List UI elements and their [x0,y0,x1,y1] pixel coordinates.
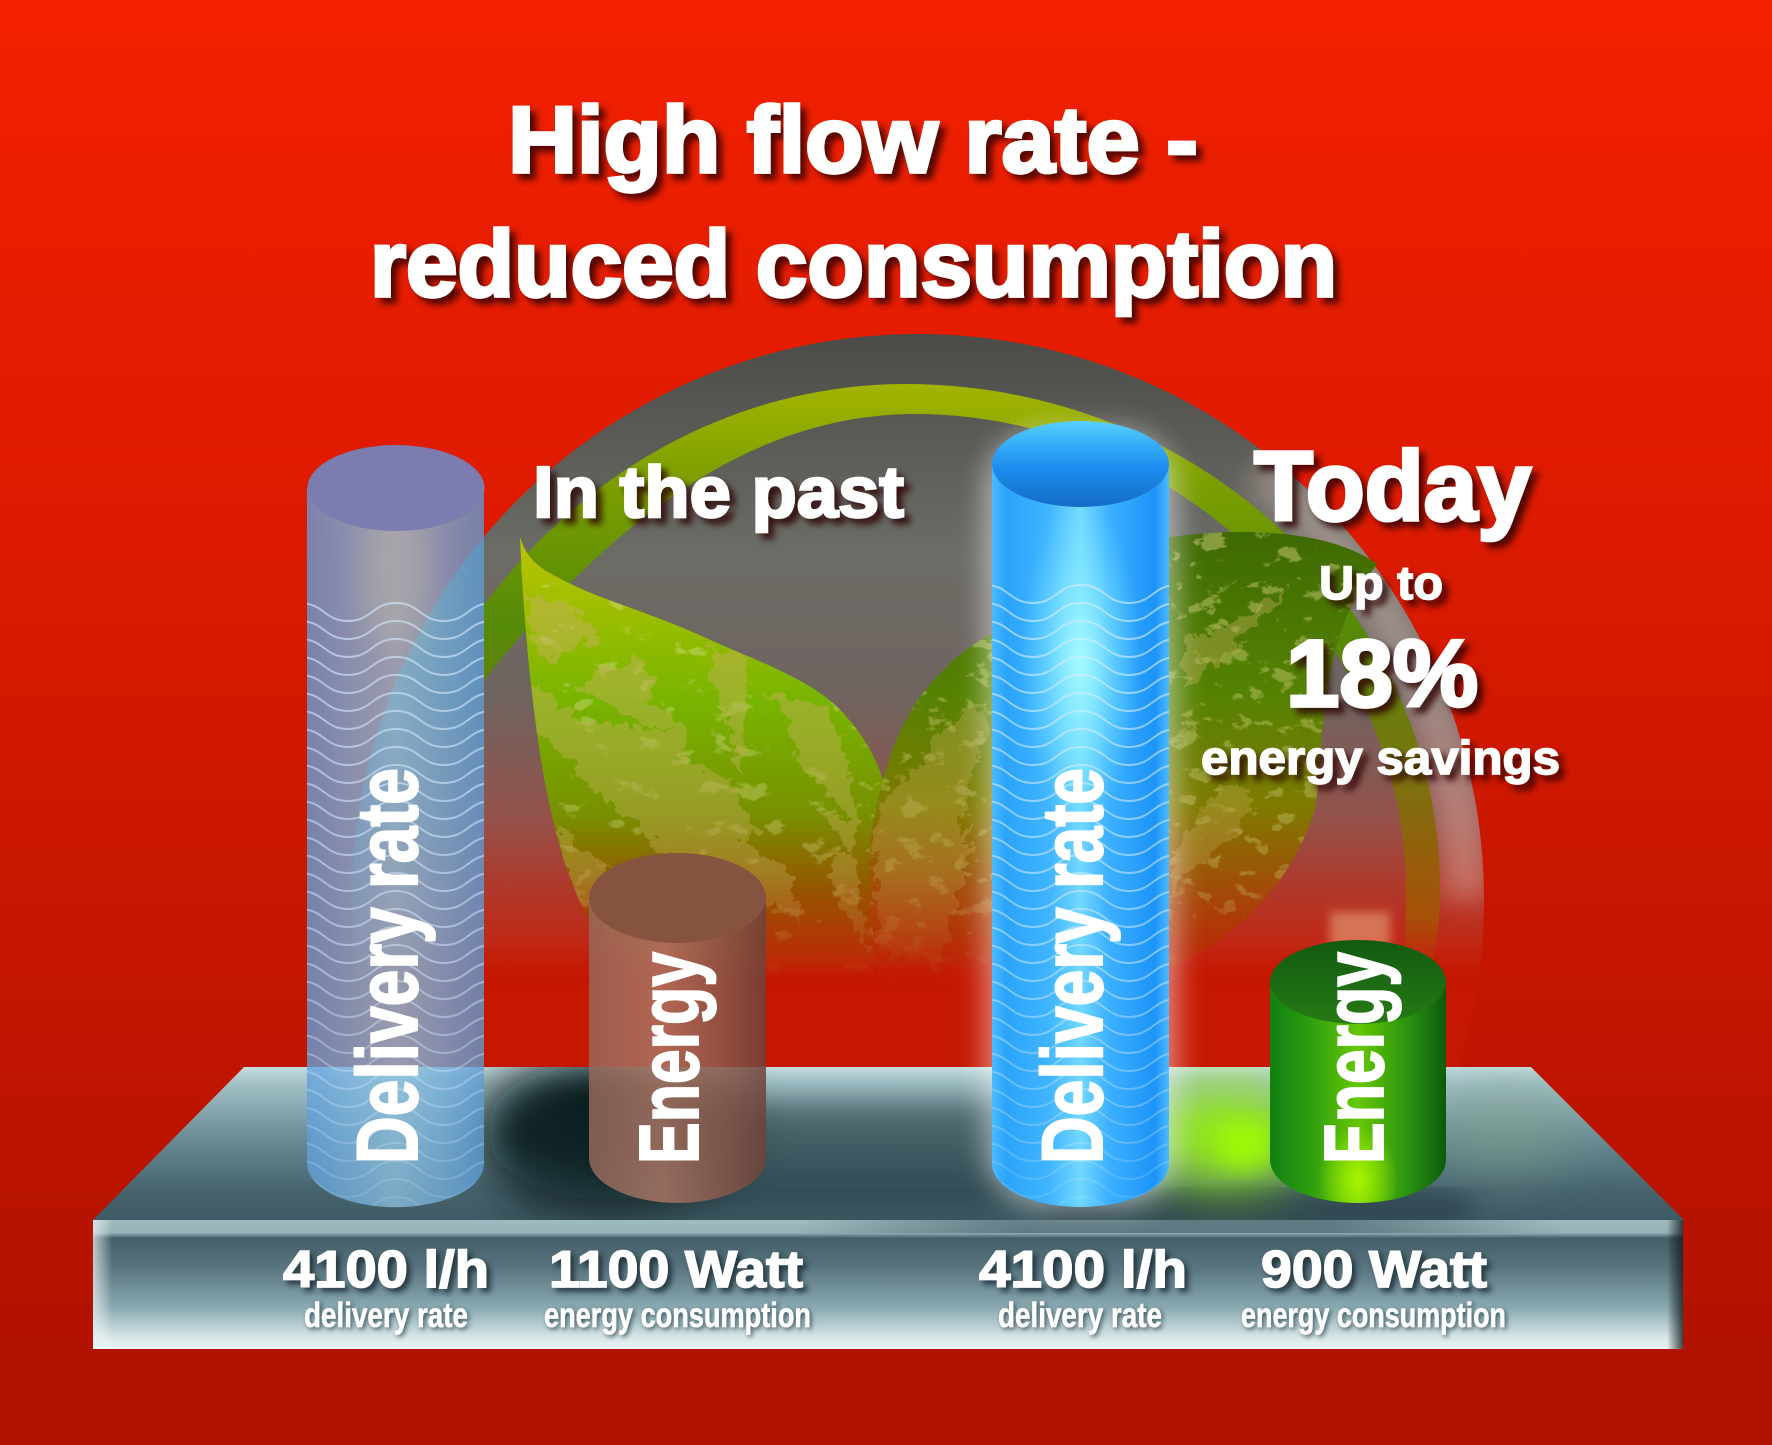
savings callout [1201,556,1560,784]
wave lines today [985,585,1177,1215]
stat: past delivery rate: 4100 l/h [283,1241,489,1299]
heading: in the past: In the past [533,453,904,533]
stat: today energy [1241,1241,1506,1335]
green arc band [484,384,1440,990]
platform shadows and glow [485,1060,1575,1221]
title: reduced consumption [370,211,1337,316]
savings callout: 18% [1286,621,1478,727]
stat: today energy: 900 Watt [1261,1241,1487,1299]
pale glow above energy cylinder [1330,912,1390,948]
stat: past energy: energy consumption [544,1296,811,1335]
platform front face [93,1220,1683,1349]
cylinder: today energy [1270,940,1446,1203]
cylinder: past energy [589,853,766,1203]
cylinder top past [308,445,484,531]
title [370,87,1337,316]
stat: past delivery rate [283,1241,489,1335]
stat: today delivery rate: delivery rate [998,1296,1162,1335]
cylinder glow: today delivery rate [985,430,1177,1208]
cylinder top today [992,421,1169,507]
stat: today energy: energy consumption [1241,1296,1506,1335]
cylinder: today delivery rate [985,421,1177,1215]
label delivery rate past: Delivery rate [340,768,436,1164]
label delivery rate today: Delivery rate [1025,768,1121,1164]
platform [93,1060,1684,1349]
wave lines past [300,603,492,1215]
title: High flow rate - [508,87,1198,192]
cylinder: past delivery rate [300,445,492,1215]
savings callout: energy savings [1201,731,1560,784]
label energy past: Energy [622,952,716,1164]
platform top face [93,1067,1684,1220]
stat: today delivery rate: 4100 l/h [979,1241,1187,1299]
stat: past delivery rate: delivery rate [304,1296,468,1335]
left leaf [515,530,890,990]
savings callout: Up to [1319,556,1443,609]
stat: past energy [544,1241,811,1335]
cylinder top energy past [589,853,766,943]
right leaf [865,530,1385,990]
label energy today: Energy [1307,952,1401,1164]
dome backdrop circle [352,334,1484,962]
stat: past energy: 1100 Watt [549,1241,803,1299]
stat: today delivery rate [979,1241,1187,1335]
heading: today: Today [1254,431,1531,541]
cylinder top energy today [1270,940,1446,1024]
